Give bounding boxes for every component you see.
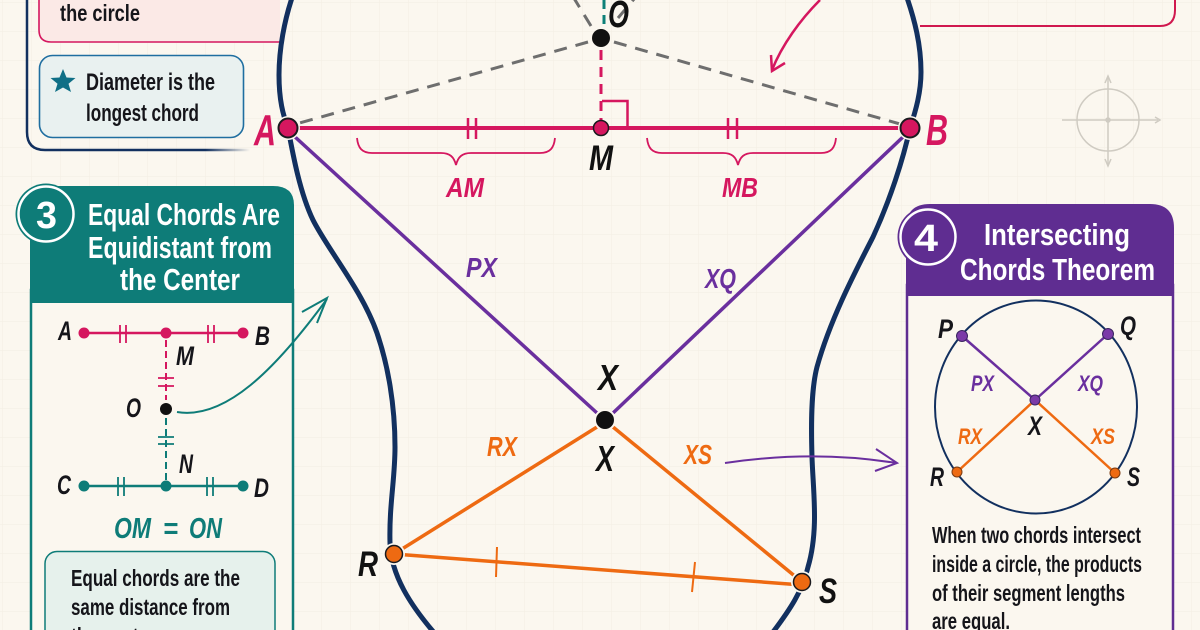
callout: equal chords note: same distance from — [71, 594, 230, 620]
point M — [589, 120, 614, 178]
diagram: equidistant chords: N — [179, 449, 193, 479]
label: PX: PX — [466, 252, 499, 283]
diagram: right angle mark — [602, 101, 628, 128]
badge 4: 4 — [914, 218, 938, 260]
point X — [594, 357, 620, 479]
point M: M — [589, 139, 614, 178]
diagram: intersecting chords circle: RX — [958, 424, 983, 449]
badge 3 — [16, 184, 76, 244]
diagram: intersecting chords circle: XQ — [1076, 371, 1103, 396]
equation: OM = ON: OM — [114, 513, 152, 545]
panel 3: equal chords — [16, 184, 294, 630]
panel 4 body — [907, 285, 1173, 630]
point X: X — [596, 357, 620, 398]
diagram: intersecting chords circle: P — [938, 314, 954, 344]
callout: diameter: longest chord — [86, 100, 199, 127]
badge 4 — [898, 206, 958, 268]
diagram: equidistant chords: O — [126, 393, 141, 423]
diagram: equidistant chords: D — [254, 473, 269, 503]
diagram: intersecting chords circle: XS — [1089, 424, 1115, 449]
point O — [592, 0, 629, 47]
callout: equal chords note — [45, 552, 275, 630]
panel 3 body — [31, 290, 293, 630]
label: MB: MB — [722, 172, 758, 203]
callout: chord definition: the circle — [60, 0, 140, 26]
diagram: intersecting chords circle: R — [930, 462, 944, 492]
callout: diameter — [40, 56, 244, 138]
diagram: perpendicular from center — [600, 50, 602, 122]
badge 3: 3 — [36, 195, 57, 237]
panel 4 header — [906, 204, 1174, 296]
callout: diameter: Diameter is the — [86, 69, 215, 96]
panel 3 title: the Center — [120, 262, 240, 297]
diagram: intersecting chords circle: X — [1026, 411, 1044, 441]
icon: faint circle with axes — [1062, 76, 1160, 166]
point A — [253, 106, 300, 155]
diagram: intersecting chords circle: S — [1127, 462, 1140, 492]
label: XQ: XQ — [703, 263, 736, 294]
label: RX: RX — [487, 431, 519, 462]
point X: X — [595, 438, 615, 479]
diagram: chord AB — [288, 118, 910, 139]
main shape outline — [279, 0, 921, 630]
panel: top-right callout — [920, 0, 1175, 26]
point A: A — [253, 106, 276, 155]
panel 4 description: of their segment lengths — [932, 580, 1125, 606]
diagram: equidistant chords: A — [57, 316, 72, 346]
callout: equal chords note: Equal chords are the — [71, 565, 240, 591]
panel: top-left definitions — [27, 0, 280, 150]
bracket: MB — [647, 138, 836, 165]
equation: OM = ON: = — [163, 513, 178, 545]
panel 4 title — [960, 217, 1155, 287]
label: AM: AM — [445, 172, 485, 203]
panel 4: intersecting chords — [898, 204, 1174, 630]
diagram: teal dashed segment — [602, 0, 606, 24]
panel 3 header — [30, 186, 294, 303]
panel 3 title — [88, 197, 280, 297]
equation: OM = ON: ON — [189, 513, 223, 545]
equation: OM = ON — [114, 513, 223, 545]
diagram: intersecting chords circle — [930, 300, 1140, 514]
diagram: equidistant chords — [57, 316, 270, 503]
panel 4 description — [932, 522, 1142, 630]
point R — [358, 543, 405, 584]
point R: R — [358, 545, 379, 584]
diagram: equidistant chords: B — [255, 321, 270, 351]
point B: B — [926, 106, 948, 155]
diagram: equidistant chords: C — [57, 470, 71, 500]
point S: S — [819, 572, 837, 611]
icon: star — [50, 69, 76, 92]
callout: chord definition — [39, 0, 280, 42]
point B — [898, 106, 948, 155]
label: XS: XS — [683, 439, 712, 470]
diagram: orange chord segments — [394, 427, 802, 592]
point S — [791, 571, 837, 611]
arrow: teal pointer — [177, 298, 327, 413]
panel 3 title: Equal Chords Are — [88, 197, 280, 232]
arrow: pink pointer — [771, 0, 820, 71]
diagram: purple chord segments — [294, 136, 904, 413]
diagram: dashed radii — [296, 0, 900, 124]
panel 3 title: Equidistant from — [88, 230, 272, 265]
diagram: equidistant chords: M — [176, 341, 194, 371]
bracket: AM — [357, 138, 555, 165]
diagram: intersecting chords circle: PX — [971, 371, 995, 396]
panel 4 title: Intersecting — [984, 217, 1130, 252]
arrow: purple pointer — [725, 449, 897, 471]
diagram: intersecting chords circle: Q — [1120, 311, 1136, 341]
